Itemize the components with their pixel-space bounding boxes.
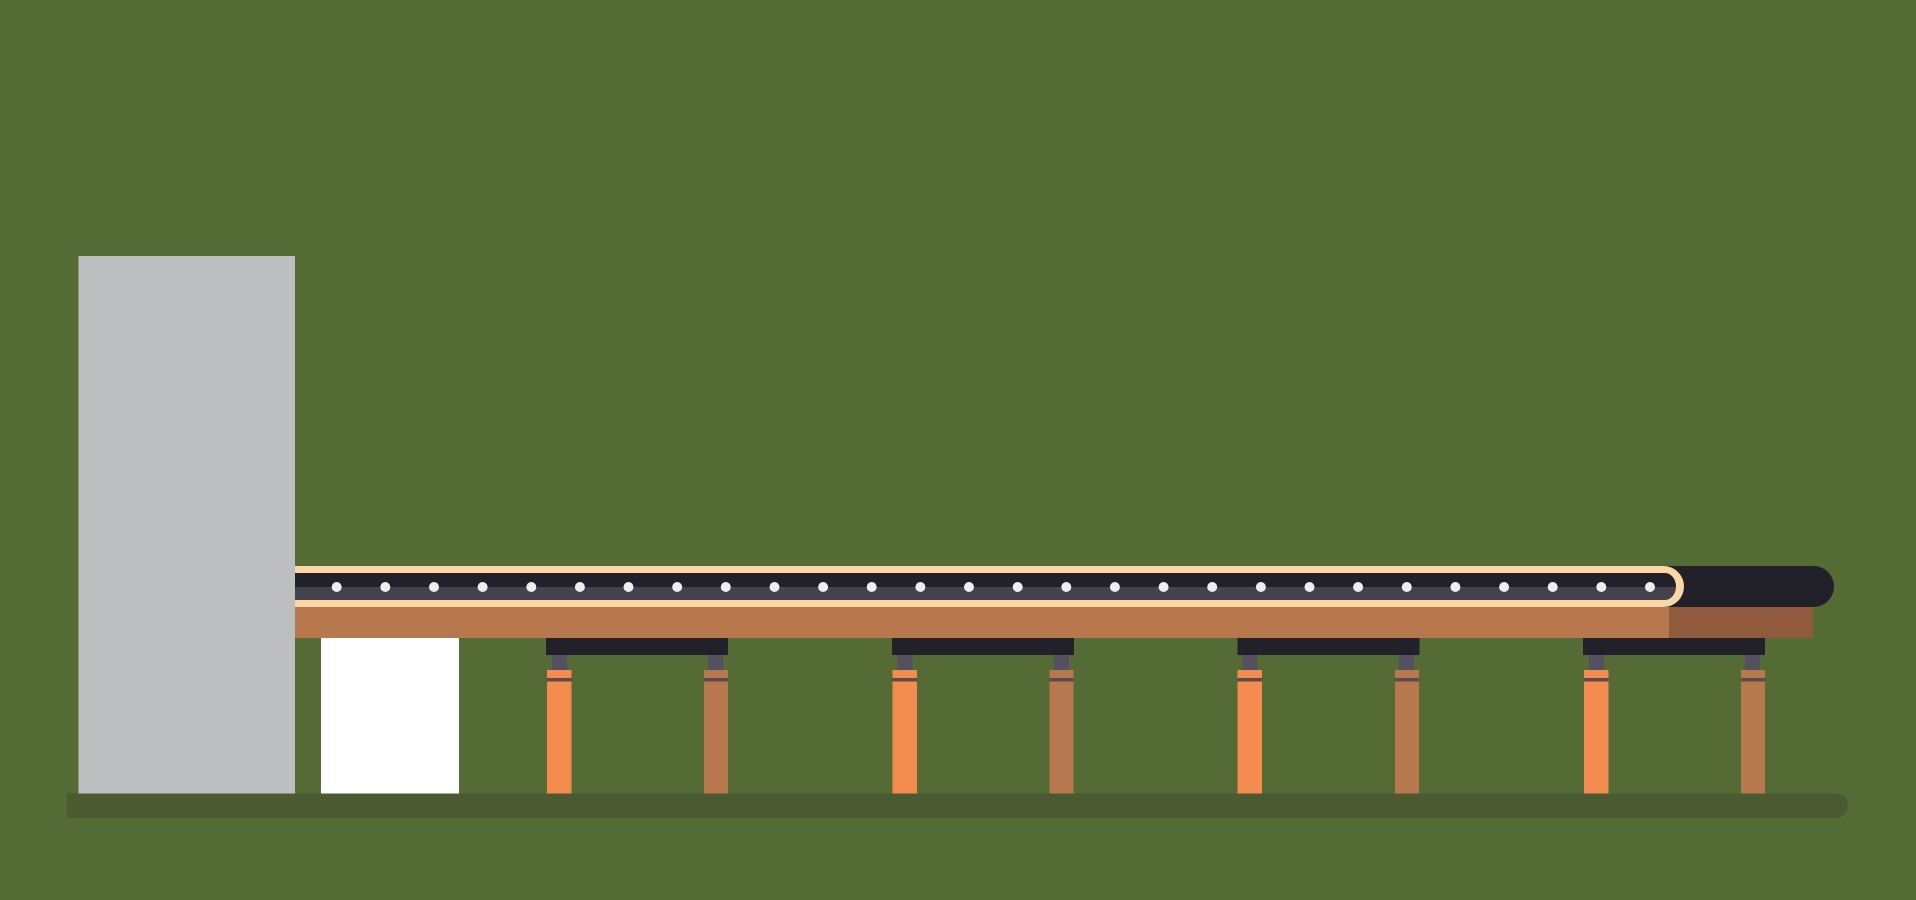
dark end housing	[1660, 566, 1834, 607]
belt rollers	[332, 582, 1655, 592]
ground strip	[67, 794, 1848, 818]
support 4	[1583, 638, 1765, 794]
support 3	[1238, 638, 1420, 794]
grey building block	[78, 256, 295, 794]
white block	[321, 638, 459, 794]
conveyor belt	[295, 566, 1684, 607]
support 2	[892, 638, 1074, 794]
support 1	[546, 638, 728, 794]
brown deck	[295, 607, 1813, 638]
